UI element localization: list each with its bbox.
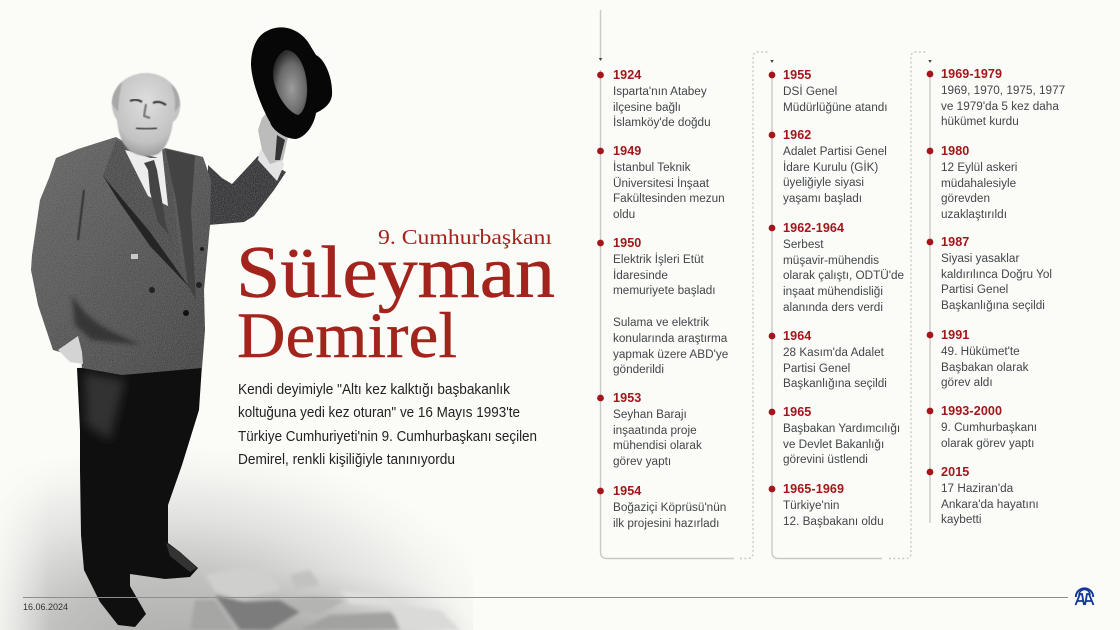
1993-2000: 1993-2000 — [941, 404, 1002, 418]
jacket — [31, 137, 211, 375]
2015: 2015 — [941, 465, 969, 479]
1953: mühendisi olarak — [613, 439, 702, 452]
name: Süleyman: Süleyman — [236, 232, 555, 314]
intro paragraph: Demirel, renkli kişiliğiyle tanınıyordu — [238, 451, 455, 468]
intro paragraph: koltuğuna yedi kez oturan" ve 16 Mayıs 1993'te — [238, 404, 520, 421]
1987: Siyasi yasaklar — [941, 252, 1019, 265]
trousers and shoes — [77, 365, 202, 627]
1993-2000: 9. Cumhurbaşkanı — [941, 421, 1037, 434]
1954: ilk projesini hazırladı — [613, 517, 719, 530]
1950: Elektrik İşleri Etüt — [613, 253, 704, 266]
2015: 17 Haziran'da — [941, 482, 1013, 495]
1965 — [783, 405, 900, 466]
1924: İslamköy'de doğdu — [613, 116, 711, 129]
1965: 1965 — [783, 405, 811, 419]
1950: memuriyete başladı — [613, 284, 716, 297]
1954: Boğaziçi Köprüsü'nün — [613, 501, 726, 514]
1987: Başkanlığına seçildi — [941, 299, 1045, 312]
1949: oldu — [613, 208, 635, 221]
date: 16.06.2024 — [23, 602, 68, 612]
2015 — [941, 465, 1039, 526]
2015: Ankara'da hayatını — [941, 498, 1039, 511]
1980 — [941, 144, 1017, 221]
1962 — [783, 128, 887, 205]
1980: 1980 — [941, 144, 969, 158]
1980: görevden — [941, 192, 990, 205]
2015: kaybetti — [941, 513, 982, 526]
1953: Seyhan Barajı — [613, 408, 687, 421]
1962-1964: müşavir-mühendis — [783, 254, 879, 267]
intro paragraph: Kendi deyimiyle "Altı kez kalktığı başbakanlık — [238, 381, 510, 398]
1962: 1962 — [783, 128, 811, 142]
intro paragraph: Türkiye Cumhuriyeti'nin 9. Cumhurbaşkanı seçilen — [238, 428, 537, 445]
1987 — [941, 235, 1052, 312]
footer line — [23, 597, 1068, 598]
1949: Üniversitesi İnşaat — [613, 177, 709, 190]
1993-2000: olarak görev yaptı — [941, 437, 1034, 450]
1950: yapmak üzere ABD'ye — [613, 348, 728, 361]
1993-2000 — [941, 404, 1037, 450]
1953 — [613, 391, 702, 468]
1969-1979: ve 1979'da 5 kez daha — [941, 100, 1059, 113]
1962-1964: alanında ders verdi — [783, 301, 883, 314]
1964: Başkanlığına seçildi — [783, 377, 887, 390]
1969-1979: 1969, 1970, 1975, 1977 — [941, 84, 1065, 97]
1953: 1953 — [613, 391, 641, 405]
timeline column 2 — [783, 68, 904, 528]
1950: gönderildi — [613, 363, 664, 376]
1950 — [613, 236, 728, 376]
background fog and rocks — [0, 475, 470, 630]
1964: Partisi Genel — [783, 362, 850, 375]
1964: 1964 — [783, 329, 811, 343]
1953: görev yaptı — [613, 455, 671, 468]
1987: Partisi Genel — [941, 283, 1008, 296]
1949: İstanbul Teknik — [613, 161, 691, 174]
1924: ilçesine bağlı — [613, 101, 681, 114]
1962-1964: 1962-1964 — [783, 221, 844, 235]
1955: 1955 — [783, 68, 811, 82]
left hand in pocket — [58, 336, 83, 364]
timeline column 3 — [941, 67, 1065, 526]
1987: 1987 — [941, 235, 969, 249]
1991 — [941, 328, 1029, 389]
1924: 1924 — [613, 68, 641, 82]
1965: ve Devlet Bakanlığı — [783, 438, 884, 451]
timeline column 1 — [613, 68, 728, 530]
1980: 12 Eylül askeri — [941, 161, 1017, 174]
1949 — [613, 144, 725, 221]
1954 — [613, 484, 726, 530]
1962: üyeliğiyle siyasi — [783, 176, 864, 189]
1950: Sulama ve elektrik — [613, 316, 709, 329]
1955 — [783, 68, 888, 114]
1955: DSİ Genel — [783, 85, 837, 98]
1949: Fakültesinden mezun — [613, 192, 725, 205]
1950: konularında araştırma — [613, 332, 727, 345]
1962: İdare Kurulu (GİK) — [783, 161, 878, 174]
1969-1979 — [941, 67, 1065, 128]
1962: yaşamı başladı — [783, 192, 862, 205]
1964: 28 Kasım'da Adalet — [783, 346, 884, 359]
1962-1964 — [783, 221, 904, 314]
1969-1979: 1969-1979 — [941, 67, 1002, 81]
1965-1969: 1965-1969 — [783, 482, 844, 496]
1924 — [613, 68, 711, 129]
raised hand — [258, 107, 288, 164]
icon: AA logo — [1074, 587, 1094, 606]
1962-1964: olarak çalıştı, ODTÜ'de — [783, 269, 904, 282]
hat — [251, 27, 332, 139]
1969-1979: hükümet kurdu — [941, 115, 1019, 128]
1987: kaldırılınca Doğru Yol — [941, 268, 1052, 281]
1965: Başbakan Yardımcılığı — [783, 422, 900, 435]
1991: 49. Hükümet'te — [941, 345, 1020, 358]
shirt and tie — [125, 149, 174, 250]
1962-1964: Serbest — [783, 238, 824, 251]
1949: 1949 — [613, 144, 641, 158]
1991: 1991 — [941, 328, 969, 342]
1950: 1950 — [613, 236, 641, 250]
raised arm and cuff — [208, 146, 286, 225]
1953: inşaatında proje — [613, 424, 697, 437]
1950: İdaresinde — [613, 269, 668, 282]
1954: 1954 — [613, 484, 641, 498]
1962: Adalet Partisi Genel — [783, 145, 887, 158]
1965-1969: Türkiye'nin — [783, 499, 839, 512]
head — [112, 73, 180, 158]
1962-1964: inşaat mühendisliği — [783, 285, 883, 298]
1980: uzaklaştırıldı — [941, 208, 1007, 221]
name: Demirel: Demirel — [237, 300, 457, 372]
1924: Isparta'nın Atabey — [613, 85, 707, 98]
1980: müdahalesiyle — [941, 177, 1016, 190]
1965-1969 — [783, 482, 884, 528]
1955: Müdürlüğüne atandı — [783, 101, 888, 114]
1964 — [783, 329, 887, 390]
1965-1969: 12. Başbakanı oldu — [783, 515, 884, 528]
1991: görev aldı — [941, 376, 993, 389]
1991: Başbakan olarak — [941, 361, 1029, 374]
1965: görevini üstlendi — [783, 453, 868, 466]
subtitle: 9. Cumhurbaşkanı: 9. Cumhurbaşkanı — [378, 225, 552, 249]
